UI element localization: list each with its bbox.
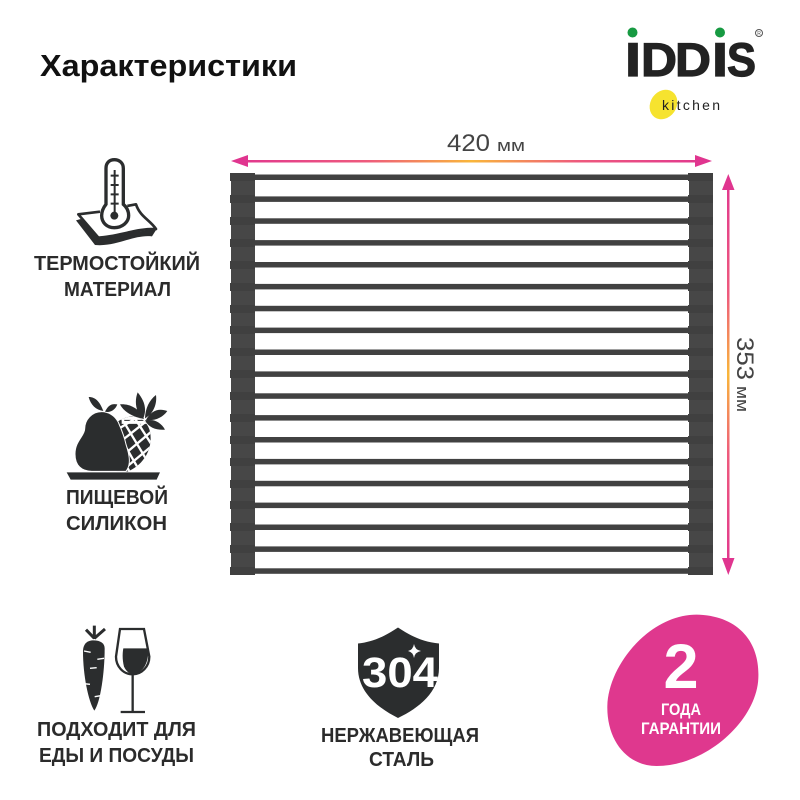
height dimension: 353 мм: мм [733, 386, 752, 412]
label: heat-resistant material: ТЕРМОСТОЙКИЙ [34, 251, 200, 275]
label: food-grade silicone: СИЛИКОН [66, 513, 167, 535]
label: stainless steel: СТАЛЬ [369, 749, 434, 771]
height dimension: 353 мм [722, 174, 758, 575]
label: heat-resistant material [34, 251, 200, 301]
label: suitable for food and dishes: ПОДХОДИТ ДЛЯ [37, 719, 196, 741]
label: food-grade silicone: ПИЩЕВОЙ [66, 485, 168, 509]
logo: iddis kitchen: R [757, 31, 761, 37]
width dimension: 420 мм: 420 [447, 130, 490, 157]
badge: 2-year warranty: 2 [663, 632, 699, 702]
badge: 2-year warranty: ГАРАНТИИ [641, 719, 721, 738]
logo: iddis kitchen: S [727, 33, 756, 86]
logo: iddis kitchen: D [675, 33, 711, 86]
icon: thermometer on heat-resistant mat [76, 160, 157, 245]
logo: iddis kitchen: kitchen [662, 97, 720, 113]
label: food-grade silicone [66, 485, 168, 535]
badge: 2-year warranty: ГОДА [661, 700, 701, 719]
icon: carrot and wine glass [83, 626, 149, 712]
width dimension: 420 мм [231, 130, 712, 167]
icon: 304 steel shield: 304 [362, 649, 438, 697]
width dimension: 420 мм: мм [497, 136, 525, 155]
label: suitable for food and dishes [37, 719, 196, 767]
label: stainless steel [321, 725, 479, 771]
label: heat-resistant material: МАТЕРИАЛ [64, 279, 171, 301]
label: stainless steel: НЕРЖАВЕЮЩАЯ [321, 725, 479, 747]
icon: 304 steel shield [358, 628, 439, 718]
logo: iddis kitchen: D [641, 33, 677, 86]
label: suitable for food and dishes: ЕДЫ И ПОСУДЫ [39, 745, 194, 767]
logo: iddis kitchen: I [712, 33, 728, 86]
logo: iddis kitchen [625, 28, 762, 125]
badge: 2-year warranty [607, 615, 758, 766]
height dimension: 353 мм: 353 [731, 337, 758, 380]
product: drying rack [230, 173, 713, 575]
title: Характеристики [40, 48, 297, 83]
logo: iddis kitchen: I [625, 33, 641, 86]
icon: fruit on a tray [67, 392, 167, 480]
